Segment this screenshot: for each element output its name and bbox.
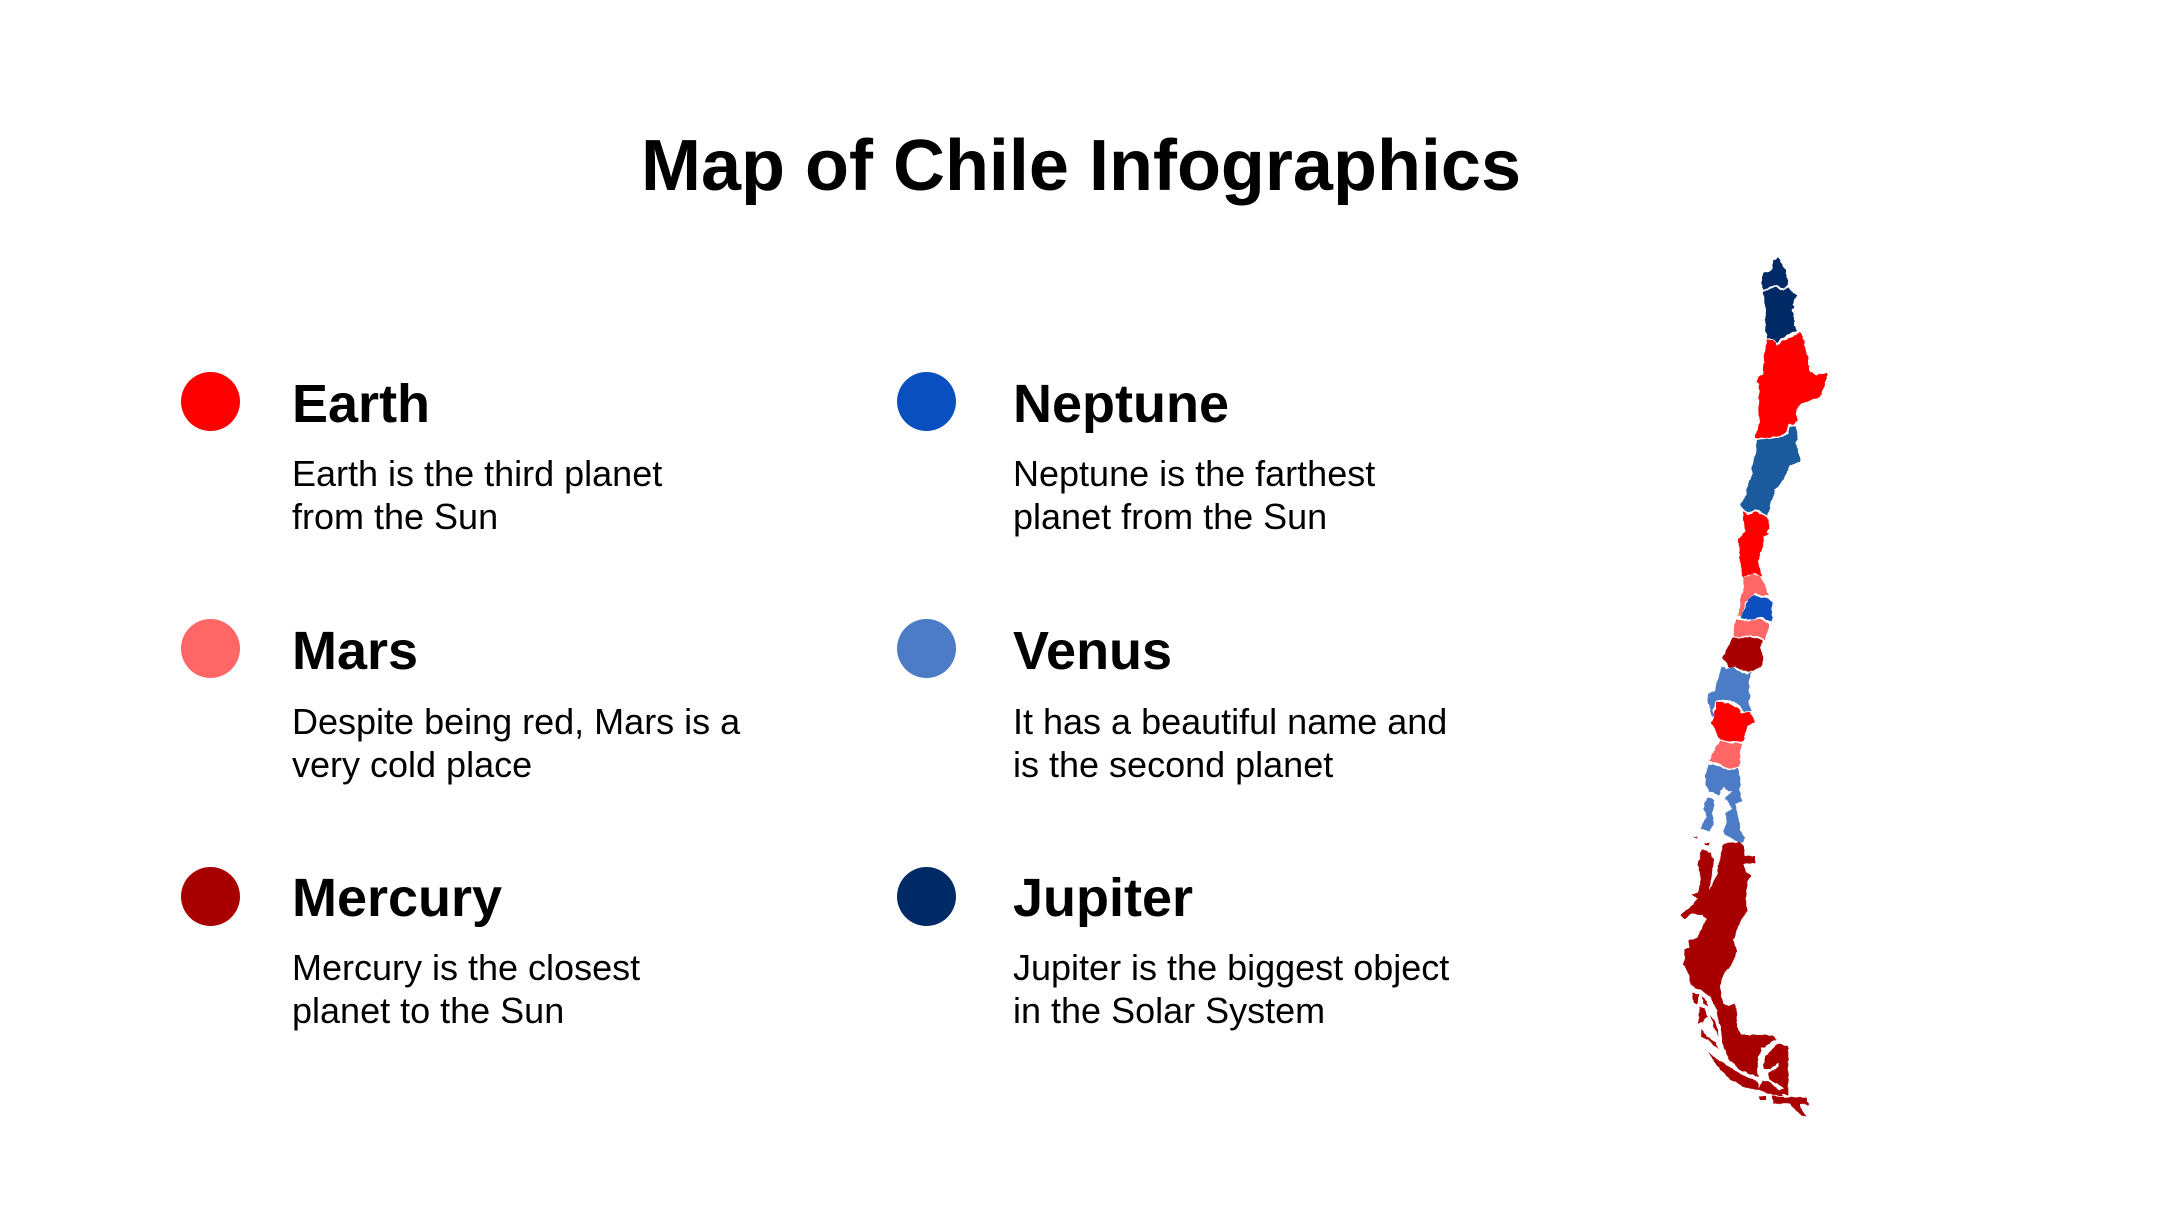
text: Earth description [292, 453, 662, 537]
icon: Neptune dot [897, 372, 956, 431]
region: Chiloe [1701, 797, 1715, 832]
text: Mars description [292, 701, 740, 785]
region: Coquimbo [1738, 511, 1769, 578]
icon: Mars dot [181, 619, 240, 678]
text: Neptune description: Neptune is the farthest [1013, 453, 1375, 494]
item: Venus [897, 619, 1447, 785]
region: Tarapaca [1763, 287, 1797, 343]
icon: Jupiter dot [897, 867, 956, 926]
map: central regions [1701, 573, 1773, 843]
region: O'Higgins [1733, 618, 1769, 639]
item: Earth [181, 372, 662, 537]
text: Neptune description: planet from the Sun [1013, 496, 1327, 537]
region: Araucania [1711, 702, 1755, 742]
text: Venus description: It has a beautiful name and [1013, 701, 1447, 742]
heading: Jupiter: Jupiter [1013, 868, 1193, 928]
item: Jupiter [897, 867, 1449, 1031]
region: Tierra del Fuego [1763, 1044, 1788, 1095]
item: Mercury [181, 867, 640, 1031]
title: Map of Chile Infographics [641, 126, 1521, 206]
text: Jupiter description: Jupiter is the biggest object [1013, 947, 1449, 988]
item: Neptune [897, 372, 1375, 537]
map: southern regions [1681, 842, 1808, 1117]
region: northern Aysen islets [1693, 837, 1713, 860]
region: Arica [1761, 258, 1789, 290]
icon: Mercury dot [181, 867, 240, 926]
text: Mercury description [292, 947, 640, 1031]
text: Mercury description: Mercury is the closest [292, 947, 640, 988]
region: Atacama [1741, 426, 1801, 516]
region: Metropolitana [1741, 595, 1773, 622]
region: Maule [1723, 637, 1763, 672]
region: southern islands [1692, 993, 1808, 1117]
text: Mars description: very cold place [292, 744, 532, 785]
heading: Neptune: Neptune [1013, 374, 1229, 434]
region: Antofagasta [1755, 332, 1827, 438]
heading: Mercury: Mercury [292, 868, 502, 928]
icon: Venus dot [897, 619, 956, 678]
icon: Earth dot [181, 372, 240, 431]
map of Chile [1681, 258, 1827, 1117]
heading: Earth: Earth [292, 374, 430, 434]
region: Aysen and Magallanes mainland [1681, 842, 1777, 1077]
text: Earth description: from the Sun [292, 496, 498, 537]
text: Venus description: is the second planet [1013, 744, 1333, 785]
region: Los Lagos [1705, 764, 1745, 843]
heading: Mars: Mars [292, 621, 418, 681]
text: Mercury description: planet to the Sun [292, 990, 564, 1031]
region: Biobio [1707, 667, 1752, 717]
text: Venus description [1013, 701, 1447, 785]
text: Earth description: Earth is the third planet [292, 453, 662, 494]
region: Valparaiso [1737, 573, 1769, 617]
region: Brunswick peninsula [1708, 1052, 1783, 1096]
heading: Venus: Venus [1013, 621, 1172, 681]
text: Jupiter description: in the Solar System [1013, 990, 1325, 1031]
map: northern regions [1738, 258, 1827, 578]
text: Neptune description [1013, 453, 1375, 537]
region: Los Rios [1709, 741, 1742, 769]
text: Jupiter description [1013, 947, 1449, 1031]
item: Mars [181, 619, 740, 785]
text: Mars description: Despite being red, Mars is a [292, 701, 740, 742]
